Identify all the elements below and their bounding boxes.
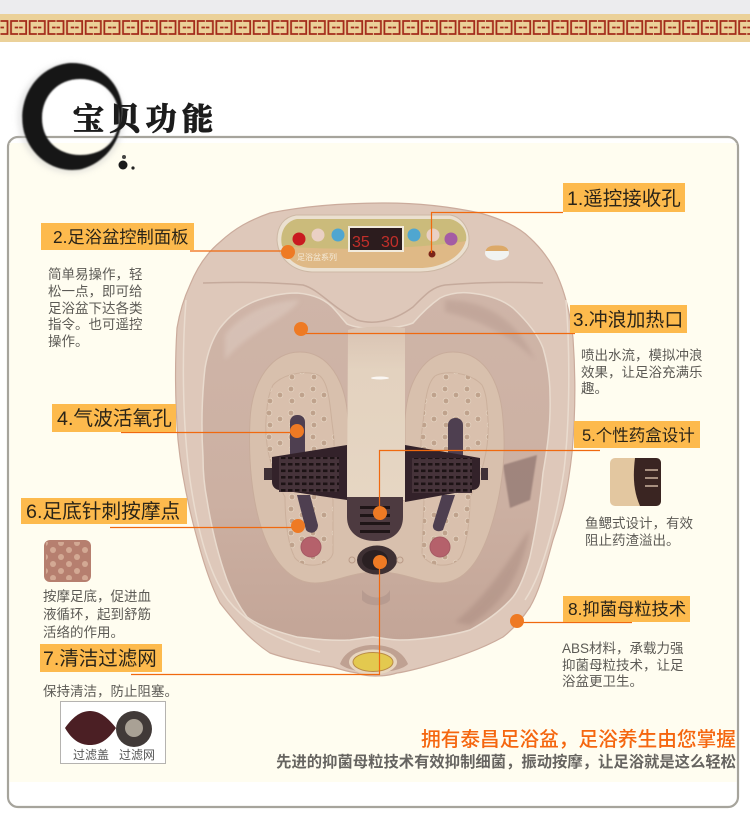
callout 1: 1.遥控接收孔 <box>567 188 681 210</box>
description 2: 简单易操作，轻 <box>48 266 142 282</box>
massage knobs <box>301 537 450 557</box>
raised foot platform <box>250 352 504 583</box>
callout 6 <box>21 498 305 640</box>
LED display <box>348 226 404 252</box>
description 6: 液循环，起到舒筋 <box>43 606 151 622</box>
inset: filter parts: 过滤网 <box>119 748 155 762</box>
description 3: 喷出水流，模拟冲浪 <box>581 348 702 363</box>
description 6: 活络的作用。 <box>43 625 124 640</box>
basin wall shading <box>225 300 537 625</box>
product: foot bath tub <box>176 203 575 676</box>
callout 5: 5.个性药盒设计 <box>582 426 695 445</box>
callout 1 <box>432 183 685 253</box>
description 5: 鱼鳃式设计，有效 <box>585 515 693 531</box>
callout 3: 3.冲浪加热口 <box>573 309 683 331</box>
callout 5 <box>373 421 700 548</box>
massage slots <box>290 415 463 533</box>
top grey strip <box>0 0 750 14</box>
front seal <box>340 645 408 674</box>
panel buttons <box>292 228 458 258</box>
drain cover <box>347 497 403 541</box>
sub slogan: 先进的抑菌母粒技术有效抑制细菌，振动按摩，让足浴就是这么轻松 <box>276 753 736 771</box>
decorative key pattern band <box>0 14 750 42</box>
bump zone left <box>266 372 334 566</box>
description 3: 效果，让足浴充满乐 <box>581 365 702 380</box>
callout 7: 7.清洁过滤网 <box>43 648 157 670</box>
description 8: 抑菌母粒技术，让足 <box>562 658 684 673</box>
description 2: 指令。也可遥控 <box>48 317 143 332</box>
tub outer shell <box>176 203 575 676</box>
description 8: ABS材料，承载力强 <box>562 641 684 656</box>
panel: content frame <box>8 137 738 807</box>
filter drain <box>349 546 403 574</box>
description 6: 按摩足底，促进血 <box>43 588 151 604</box>
thumbnail: medicine box <box>610 458 661 506</box>
description 3: 趣。 <box>581 381 608 396</box>
deck ridge <box>203 282 543 322</box>
callout 8: 8.抑菌母粒技术 <box>568 599 686 619</box>
title: 宝贝功能 <box>73 102 213 137</box>
thumbnail: massage bumps <box>44 540 91 582</box>
inset: filter parts: 过滤盖 <box>73 748 109 762</box>
callout 4 <box>52 404 304 438</box>
callout 3 <box>294 305 706 396</box>
callout 8 <box>510 596 690 689</box>
callout 2: 2.足浴盆控制面板 <box>53 227 188 247</box>
quality badge <box>485 246 509 260</box>
description 2: 足浴盆下达各类 <box>48 301 142 316</box>
LED display: 35 <box>352 234 370 251</box>
column highlight <box>371 376 389 380</box>
brand mark: 足浴盆系列 <box>297 252 337 262</box>
description 5: 阻止药渣溢出。 <box>585 533 680 548</box>
bump zone right <box>420 372 489 566</box>
roller right <box>405 445 488 502</box>
control panel <box>277 215 469 272</box>
description 2: 操作。 <box>48 334 88 349</box>
rim highlight <box>183 300 569 652</box>
icon: ink brush circle <box>21 63 135 170</box>
slogan: 拥有泰昌足浴盆，足浴养生由您掌握 <box>421 729 736 751</box>
callout 6: 6.足底针刺按摩点 <box>26 501 180 523</box>
callout 2 <box>41 223 295 349</box>
LED display: 30 <box>381 234 399 251</box>
description 7: 保持清洁，防止阻塞。 <box>43 683 178 699</box>
inset: filter parts <box>60 702 166 764</box>
description 8: 浴盆更卫生。 <box>562 674 643 689</box>
callout 7 <box>40 555 387 764</box>
center column <box>347 327 405 500</box>
description 2: 松一点，即可给 <box>48 284 142 299</box>
roller left <box>264 445 347 500</box>
tub basin <box>202 293 550 640</box>
drain reflection <box>362 590 390 605</box>
callout 4: 4.气波活氧孔 <box>57 408 172 430</box>
